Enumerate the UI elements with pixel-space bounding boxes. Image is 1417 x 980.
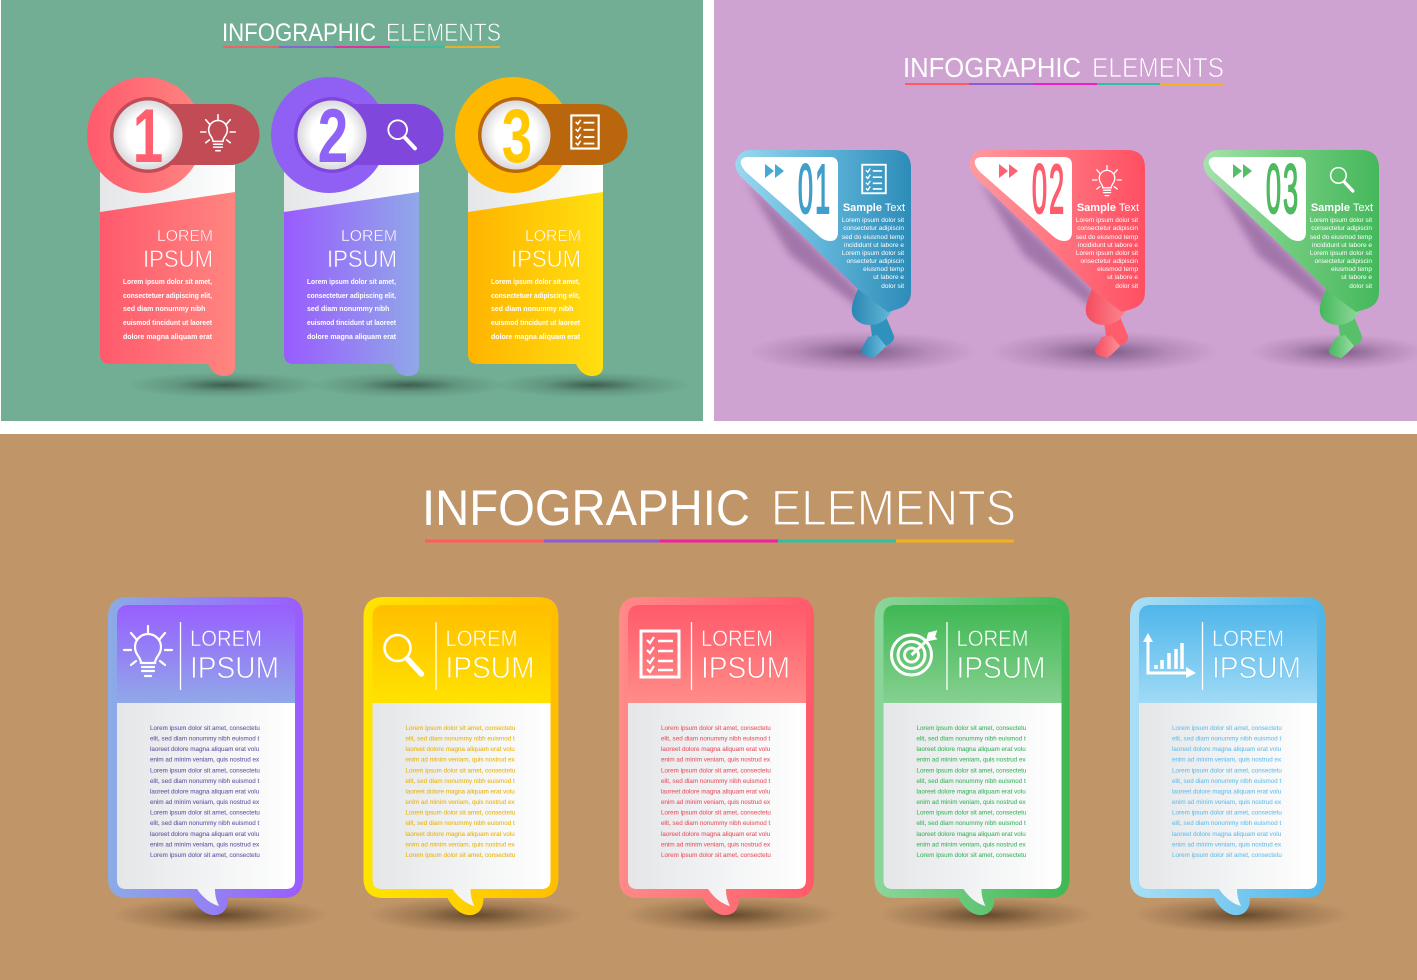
text block: elit, sed diam nonummy nibh euismod t xyxy=(661,736,770,743)
text: sample text: Lorem ipsum dolor sit xyxy=(1310,217,1372,224)
icon: light bulb xyxy=(201,115,235,151)
text block: enim ad minim veniam, quis nostrud ex xyxy=(1172,799,1282,806)
heading: lorem ipsum xyxy=(190,626,279,685)
text: lorem ipsum: sed diam nonummy nibh xyxy=(491,306,573,313)
panel: step 3 card xyxy=(455,77,691,398)
text block: laoreet dolore magna aliquam erat volu xyxy=(406,831,515,838)
heading: lorem ipsum: IPSUM xyxy=(1212,650,1301,685)
text block: laoreet dolore magna aliquam erat volu xyxy=(150,746,260,753)
text block: enim ad minim veniam, quis nostrud ex xyxy=(661,757,771,764)
heading: tan panel title: ELEMENTS xyxy=(771,480,1016,536)
icon: checklist xyxy=(571,115,599,149)
text block: elit, sed diam nonummy nibh euismod t xyxy=(916,736,1026,743)
text block: laoreet dolore magna aliquam erat volu xyxy=(406,746,515,753)
text: lorem ipsum xyxy=(307,228,397,341)
text block: enim ad minim veniam, quis nostrud ex xyxy=(406,799,516,806)
heading: lorem ipsum: IPSUM xyxy=(446,650,534,685)
heading: lorem ipsum xyxy=(956,626,1046,685)
text block: elit, sed diam nonummy nibh euismod t xyxy=(661,820,770,827)
text block: elit, sed diam nonummy nibh euismod t xyxy=(406,820,515,827)
heading: lorem ipsum: IPSUM xyxy=(701,650,790,685)
text: sample text: onsectetur adipiscin xyxy=(1081,258,1138,265)
heading: lorem ipsum xyxy=(701,626,790,685)
panel: green speech card xyxy=(874,597,1094,933)
number 01: 01 xyxy=(798,151,832,229)
text block: elit, sed diam nonummy nibh euismod t xyxy=(150,778,259,785)
text: sample text: eiusmod temp xyxy=(863,266,904,273)
text block: Lorem ipsum dolor sit amet, consectetu xyxy=(916,725,1027,732)
text block: Lorem ipsum dolor sit amet, consectetu xyxy=(406,725,516,732)
text: sample text: sed do eiusmod temp xyxy=(842,234,904,241)
text: sample text: onsectetur adipiscin xyxy=(1315,258,1372,265)
icon: bar chart xyxy=(1143,633,1196,678)
text: lorem ipsum: consectetuer adipiscing elit, xyxy=(307,293,396,300)
text block xyxy=(1172,725,1282,859)
icon: magnifier xyxy=(388,120,415,148)
icon: checklist xyxy=(862,165,886,193)
heading: lorem ipsum: IPSUM xyxy=(956,650,1046,685)
heading: green panel title: INFOGRAPHIC xyxy=(222,19,376,47)
text block: Lorem ipsum dolor sit amet, consectetu xyxy=(916,852,1027,859)
panel: yellow speech card xyxy=(364,597,584,933)
text block: elit, sed diam nonummy nibh euismod t xyxy=(1172,778,1281,785)
text: lorem ipsum xyxy=(491,228,581,341)
heading: lorem ipsum: LOREM xyxy=(446,626,518,651)
heading: lorem ipsum xyxy=(1212,626,1301,685)
panel: ribbon card 03 xyxy=(1203,150,1417,370)
text block: enim ad minim veniam, quis nostrud ex xyxy=(916,841,1027,848)
text: lorem ipsum: dolore magna aliquam erat xyxy=(307,334,397,341)
text: sample text: Sample Text xyxy=(843,202,905,214)
panel: tan background xyxy=(0,434,1417,980)
text: sample text xyxy=(1076,202,1139,290)
heading: green panel title xyxy=(222,19,501,47)
text: lorem ipsum: LOREM xyxy=(525,228,581,245)
text block: enim ad minim veniam, quis nostrud ex xyxy=(406,841,516,848)
panel: blue speech card xyxy=(1130,597,1350,933)
text block: laoreet dolore magna aliquam erat volu xyxy=(661,788,771,796)
panel: ribbon card 01 xyxy=(735,150,977,373)
text: sample text: dolor sit xyxy=(1115,283,1138,290)
text: sample text: sed do eiusmod temp xyxy=(1076,234,1138,241)
text block: enim ad minim veniam, quis nostrud ex xyxy=(406,757,516,764)
heading: lorem ipsum: IPSUM xyxy=(190,650,279,685)
text block: Lorem ipsum dolor sit amet, consectetu xyxy=(661,767,771,774)
heading: lorem ipsum: LOREM xyxy=(956,626,1028,651)
text block: Lorem ipsum dolor sit amet, consectetu xyxy=(406,852,516,859)
text: sample text: sed do eiusmod temp xyxy=(1310,234,1372,241)
text: lorem ipsum: consectetuer adipiscing elit, xyxy=(491,293,580,300)
icon: magnifier xyxy=(1331,168,1353,191)
number 2: 2 xyxy=(318,94,348,179)
text block: Lorem ipsum dolor sit amet, consectetu xyxy=(661,725,771,732)
heading: lorem ipsum xyxy=(446,626,534,685)
text block: enim ad minim veniam, quis nostrud ex xyxy=(916,799,1027,806)
text block: Lorem ipsum dolor sit amet, consectetu xyxy=(150,767,260,774)
text block: elit, sed diam nonummy nibh euismod t xyxy=(661,778,770,785)
text: sample text: incididunt ut labore e xyxy=(844,242,904,249)
icon: chevrons xyxy=(765,164,784,178)
text block: Lorem ipsum dolor sit amet, consectetu xyxy=(150,725,260,732)
text block xyxy=(150,725,260,859)
text block: laoreet dolore magna aliquam erat volu xyxy=(150,831,260,838)
text: lorem ipsum: dolore magna aliquam erat xyxy=(491,334,581,341)
text: sample text: Lorem ipsum dolor sit xyxy=(1310,250,1372,257)
icon: light bulb xyxy=(124,626,172,676)
text block: enim ad minim veniam, quis nostrud ex xyxy=(661,799,771,806)
text block: Lorem ipsum dolor sit amet, consectetu xyxy=(661,810,771,817)
text block: laoreet dolore magna aliquam erat volu xyxy=(406,788,515,796)
heading: lorem ipsum: LOREM xyxy=(1212,626,1284,651)
panel: step 1 card xyxy=(87,77,323,398)
text: sample text: Lorem ipsum dolor sit xyxy=(842,250,904,257)
heading: purple panel title: INFOGRAPHIC xyxy=(903,52,1081,83)
number 1: 1 xyxy=(133,94,163,179)
text block: Lorem ipsum dolor sit amet, consectetu xyxy=(1172,725,1282,732)
text block: enim ad minim veniam, quis nostrud ex xyxy=(1172,841,1282,848)
panel: ribbon card 02 xyxy=(969,150,1219,373)
text: sample text xyxy=(842,202,905,290)
text block: Lorem ipsum dolor sit amet, consectetu xyxy=(150,852,260,859)
text: sample text: Lorem ipsum dolor sit xyxy=(842,217,904,224)
number 3: 3 xyxy=(502,94,532,179)
text block: laoreet dolore magna aliquam erat volu xyxy=(916,788,1026,796)
text block xyxy=(661,725,771,859)
text block: Lorem ipsum dolor sit amet, consectetu xyxy=(406,810,516,817)
text block: Lorem ipsum dolor sit amet, consectetu xyxy=(1172,767,1282,774)
text: sample text: ut labore e xyxy=(1341,274,1372,281)
text block: elit, sed diam nonummy nibh euismod t xyxy=(916,820,1026,827)
text: sample text: eiusmod temp xyxy=(1097,266,1138,273)
text: sample text: consectetur adipiscin xyxy=(1077,225,1138,232)
text: lorem ipsum: Lorem ipsum dolor sit amet, xyxy=(307,279,396,286)
text: sample text: Lorem ipsum dolor sit xyxy=(1076,217,1138,224)
text block: laoreet dolore magna aliquam erat volu xyxy=(661,746,771,753)
text block: Lorem ipsum dolor sit amet, consectetu xyxy=(661,852,771,859)
icon: chevrons xyxy=(999,164,1018,178)
text: sample text: consectetur adipiscin xyxy=(1311,225,1372,232)
text block xyxy=(916,725,1027,859)
text block: laoreet dolore magna aliquam erat volu xyxy=(916,831,1026,838)
text: lorem ipsum: IPSUM xyxy=(143,246,213,273)
text: lorem ipsum: euismod tincidunt ut laoreet xyxy=(491,320,581,327)
text: sample text xyxy=(1310,202,1373,290)
text: lorem ipsum: euismod tincidunt ut laoreet xyxy=(123,320,213,327)
text block: Lorem ipsum dolor sit amet, consectetu xyxy=(916,767,1027,774)
text block: Lorem ipsum dolor sit amet, consectetu xyxy=(916,810,1027,817)
text: sample text: onsectetur adipiscin xyxy=(847,258,904,265)
text block: Lorem ipsum dolor sit amet, consectetu xyxy=(406,767,516,774)
heading: lorem ipsum: LOREM xyxy=(701,626,773,651)
text: sample text: consectetur adipiscin xyxy=(843,225,904,232)
text block: elit, sed diam nonummy nibh euismod t xyxy=(916,778,1026,785)
text block: laoreet dolore magna aliquam erat volu xyxy=(661,831,771,838)
text block: laoreet dolore magna aliquam erat volu xyxy=(1172,746,1282,753)
panel: purple background xyxy=(714,0,1417,421)
text: lorem ipsum: sed diam nonummy nibh xyxy=(123,306,205,313)
text: lorem ipsum: IPSUM xyxy=(511,246,581,273)
text: sample text: Sample Text xyxy=(1311,202,1373,214)
text: lorem ipsum: dolore magna aliquam erat xyxy=(123,334,213,341)
text block: laoreet dolore magna aliquam erat volu xyxy=(150,788,260,796)
text block: enim ad minim veniam, quis nostrud ex xyxy=(150,799,260,806)
text: lorem ipsum: euismod tincidunt ut laoreet xyxy=(307,320,397,327)
text: sample text: eiusmod temp xyxy=(1331,266,1372,273)
text block: Lorem ipsum dolor sit amet, consectetu xyxy=(1172,810,1282,817)
text: lorem ipsum: LOREM xyxy=(341,228,397,245)
text block: laoreet dolore magna aliquam erat volu xyxy=(1172,831,1282,838)
text block: elit, sed diam nonummy nibh euismod t xyxy=(1172,736,1281,743)
icon: chevrons xyxy=(1233,164,1252,178)
text block: elit, sed diam nonummy nibh euismod t xyxy=(150,820,259,827)
text block: elit, sed diam nonummy nibh euismod t xyxy=(150,736,259,743)
text: sample text: incididunt ut labore e xyxy=(1078,242,1138,249)
icon: target xyxy=(892,631,936,675)
text: lorem ipsum: consectetuer adipiscing elit, xyxy=(123,293,212,300)
icon: checklist xyxy=(641,631,679,677)
heading: purple panel title: ELEMENTS xyxy=(1092,52,1224,83)
text: sample text: ut labore e xyxy=(873,274,904,281)
panel: purple speech card xyxy=(108,597,328,933)
text: sample text: dolor sit xyxy=(881,283,904,290)
heading: lorem ipsum: LOREM xyxy=(190,626,262,651)
text: lorem ipsum: IPSUM xyxy=(327,246,397,273)
text: lorem ipsum: sed diam nonummy nibh xyxy=(307,306,389,313)
text block: elit, sed diam nonummy nibh euismod t xyxy=(1172,820,1281,827)
text: lorem ipsum: LOREM xyxy=(157,228,213,245)
text block: laoreet dolore magna aliquam erat volu xyxy=(1172,788,1282,796)
panel: step 2 card xyxy=(271,77,507,398)
text block: enim ad minim veniam, quis nostrud ex xyxy=(150,841,260,848)
text block: enim ad minim veniam, quis nostrud ex xyxy=(150,757,260,764)
text block: enim ad minim veniam, quis nostrud ex xyxy=(1172,757,1282,764)
text: sample text: ut labore e xyxy=(1107,274,1138,281)
icon: magnifier xyxy=(384,635,422,674)
text block: Lorem ipsum dolor sit amet, consectetu xyxy=(150,810,260,817)
text block: enim ad minim veniam, quis nostrud ex xyxy=(661,841,771,848)
text: lorem ipsum xyxy=(123,228,213,341)
text: lorem ipsum: Lorem ipsum dolor sit amet, xyxy=(123,279,212,286)
panel: green background xyxy=(1,0,703,421)
text block: elit, sed diam nonummy nibh euismod t xyxy=(406,778,515,785)
text: sample text: Sample Text xyxy=(1077,202,1139,214)
text: sample text: dolor sit xyxy=(1349,283,1372,290)
text: sample text: Lorem ipsum dolor sit xyxy=(1076,250,1138,257)
text: lorem ipsum: Lorem ipsum dolor sit amet, xyxy=(491,279,580,286)
heading: green panel title: ELEMENTS xyxy=(386,19,501,47)
text block: laoreet dolore magna aliquam erat volu xyxy=(916,746,1026,753)
text block xyxy=(406,725,516,859)
number 03: 03 xyxy=(1266,151,1300,229)
text block: Lorem ipsum dolor sit amet, consectetu xyxy=(1172,852,1282,859)
panel: red speech card xyxy=(619,597,839,933)
icon: light bulb xyxy=(1093,166,1121,196)
text: sample text: incididunt ut labore e xyxy=(1312,242,1372,249)
text block: enim ad minim veniam, quis nostrud ex xyxy=(916,757,1027,764)
heading: tan panel title xyxy=(422,480,1016,541)
heading: tan panel title: INFOGRAPHIC xyxy=(422,480,750,536)
heading: purple panel title xyxy=(903,52,1224,84)
number 02: 02 xyxy=(1032,151,1066,229)
text block: elit, sed diam nonummy nibh euismod t xyxy=(406,736,515,743)
